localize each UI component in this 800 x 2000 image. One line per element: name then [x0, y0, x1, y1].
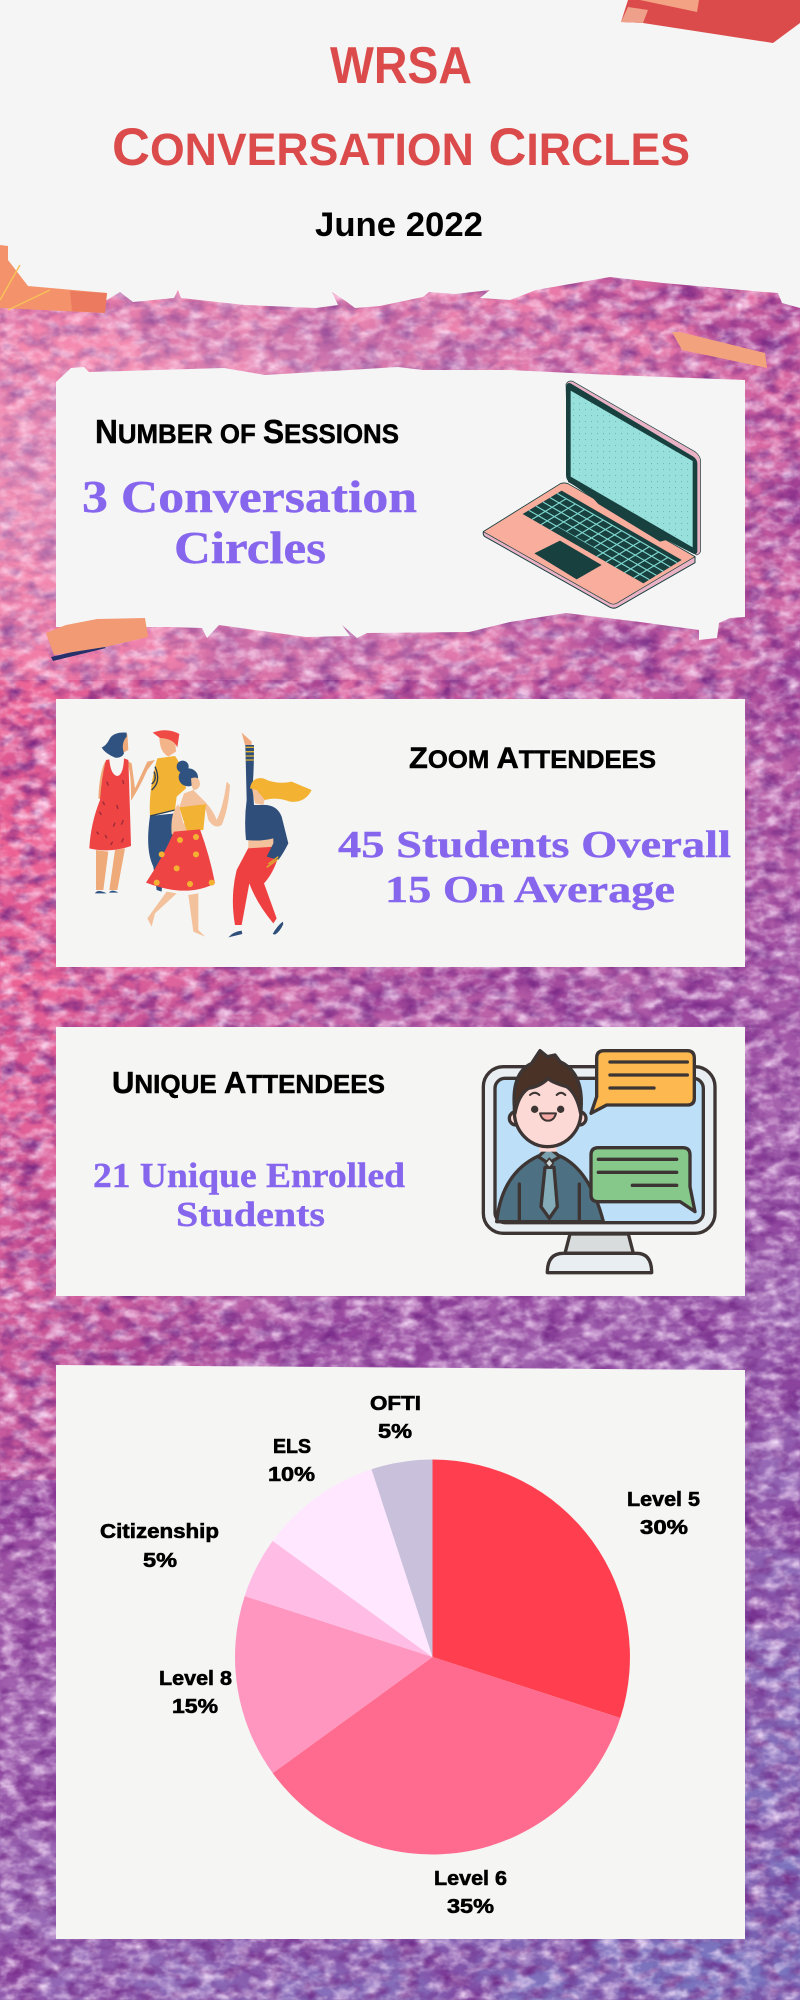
value: 21 unique enrolled students: 21 Unique Enrolled: [93, 1156, 406, 1195]
label: Level 8 15%: Level 8: [159, 1668, 232, 1690]
decoration: red torn paper, top right: [621, 0, 800, 43]
woman with raised arm: [228, 733, 312, 937]
label: Citizenship 5%: 5%: [143, 1550, 177, 1572]
label: OFTI 5%: 5%: [378, 1421, 412, 1443]
slice: OFTI 5%: [372, 1460, 432, 1657]
label: Level 6 35%: 35%: [447, 1896, 494, 1918]
label: Level 6 35%: Level 6: [434, 1868, 507, 1890]
decoration: peach torn paper, left: [0, 245, 107, 313]
value: 21 unique enrolled students: [93, 1156, 406, 1234]
icon: laptop: [483, 381, 701, 608]
slice: Level 5 30%: [432, 1460, 630, 1718]
heading: Unique Attendees: UNIQUE ATTENDEES: [112, 1065, 385, 1100]
label: Citizenship 5%: [100, 1521, 219, 1572]
slice: Level 6 35%: [273, 1657, 620, 1854]
label: Level 5 30%: Level 5: [627, 1489, 700, 1511]
value: 45 students overall, 15 on average: 15 On Average: [385, 869, 675, 911]
heading: Number of Sessions: NUMBER OF SESSIONS: [95, 413, 399, 450]
value: 45 students overall, 15 on average: [338, 824, 731, 911]
date: June 2022: June 2022: [315, 206, 483, 244]
label: ELS 10%: [268, 1436, 315, 1486]
woman in red dress: [89, 733, 155, 893]
label: ELS 10%: ELS: [273, 1436, 311, 1458]
label: Level 6 35%: [434, 1868, 507, 1918]
header panel: torn paper: [0, 0, 800, 313]
label: ELS 10%: 10%: [268, 1464, 315, 1486]
slice: ELS 10%: [273, 1469, 432, 1657]
value: 21 unique enrolled students: Students: [176, 1195, 325, 1234]
illustration: four people dancing and talking: [89, 730, 312, 937]
pie chart: [235, 1460, 630, 1854]
panel: number of sessions: [46, 367, 745, 661]
label: Citizenship 5%: Citizenship: [100, 1521, 219, 1543]
label: Level 5 30%: 30%: [640, 1517, 688, 1539]
woman in polka dot skirt: [146, 761, 230, 937]
heading: Zoom Attendees: ZOOM ATTENDEES: [409, 742, 656, 775]
panel: zoom attendees: [56, 699, 745, 967]
panel: unique attendees: [56, 1027, 745, 1296]
slice: Level 8 15%: [235, 1596, 432, 1773]
panel: pie chart of attendee levels: [56, 1365, 745, 1939]
slice: Citizenship 5%: [245, 1541, 432, 1657]
icon: man on monitor with chat bubbles: [483, 1051, 715, 1273]
value: 3 Conversation Circles: 3 Conversation: [82, 472, 417, 522]
title: WRSA: WRSA: [330, 37, 472, 95]
label: OFTI 5%: [370, 1393, 421, 1443]
decoration: peach tape under header, right: [672, 332, 767, 368]
value: 3 Conversation Circles: [82, 472, 417, 573]
man in yellow shirt: [148, 730, 186, 892]
label: OFTI 5%: OFTI: [370, 1393, 421, 1415]
decoration: peach tape with navy edge: [46, 618, 148, 661]
label: Level 8 15%: 15%: [172, 1696, 218, 1718]
label: Level 5 30%: [627, 1489, 700, 1539]
value: 3 Conversation Circles: Circles: [174, 523, 326, 573]
title: Conversation Circles: CONVERSATION CIRCLES: [112, 118, 690, 177]
label: Level 8 15%: [159, 1668, 232, 1718]
value: 45 students overall, 15 on average: 45 Students Overall: [338, 824, 731, 866]
